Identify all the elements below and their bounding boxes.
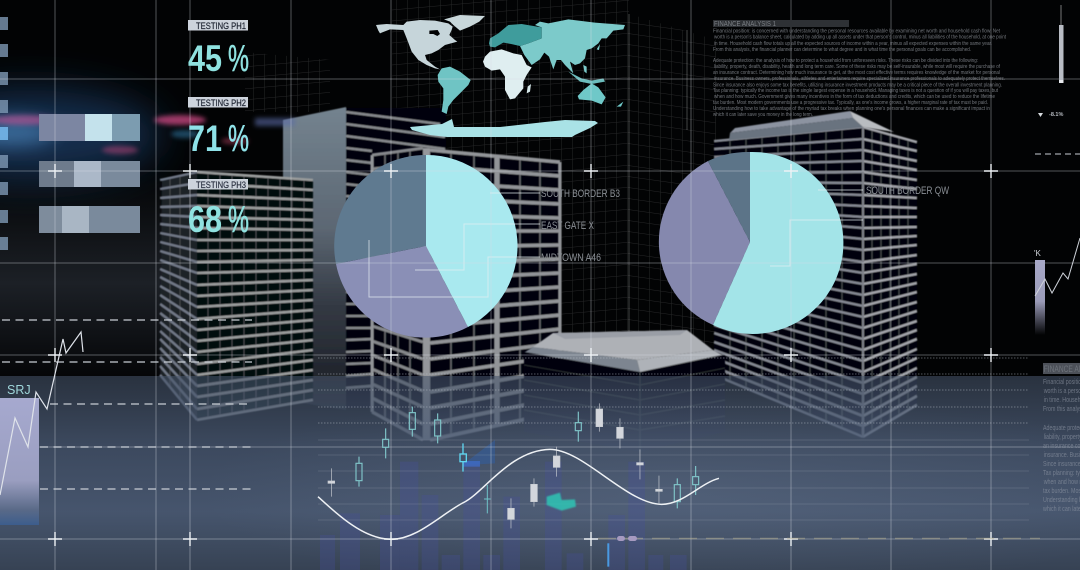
finance analysis text block: insurance. Business owners, professionals, athletes and entertainers require specialized insurance professionals to adequately protect themselves. — [714, 76, 1005, 82]
floor — [0, 376, 1080, 570]
building: left tower — [160, 172, 313, 420]
finance analysis text block, lower copy — [1042, 363, 1080, 513]
finance analysis text block: Since insurance also enjoys some tax benefits, utilizing insurance investment products may be a critical piece of the overall investment planning. — [713, 82, 1002, 88]
new zealand — [617, 102, 623, 107]
slice: cyan — [713, 152, 843, 334]
australia — [578, 83, 606, 104]
pie chart 1 — [334, 155, 518, 338]
segmented bars — [39, 114, 140, 233]
south america — [438, 67, 471, 114]
finance analysis text block — [713, 20, 1007, 118]
lens flare — [0, 90, 295, 180]
pie labels: SOUTH BORDER B3 — [541, 188, 620, 200]
old world — [483, 19, 625, 107]
japan — [597, 44, 600, 50]
delta readout: -8.1% — [1049, 112, 1063, 118]
finance analysis text block: an insurance contract. Determining how much insurance to get, at the most cost effective terms requires knowledge of the market for personal — [713, 70, 1000, 76]
candlesticks — [328, 403, 699, 528]
finance analysis text block: which it can later save you money in the long term. — [713, 112, 813, 118]
pie labels: SOUTH BORDER QW — [866, 185, 949, 197]
finance analysis text block: Understanding how to take advantage of the myriad tax breaks when planning one's personal finances can make a significant impact in — [713, 106, 990, 112]
bright candle — [460, 443, 466, 472]
world map — [376, 15, 625, 137]
right line chart — [1034, 238, 1080, 335]
finance analysis text block: in time. Household cash flow totals up all the expected sources of income within a year, minus all expected expenses within the same year. — [714, 41, 992, 47]
finance analysis text block: From this analysis, the financial planner can determine to what degree and in what time the personal goals can be accomplished. — [713, 47, 971, 53]
bar — [1035, 260, 1045, 335]
madagascar — [527, 84, 531, 93]
testing stat: phase 2: TESTING PH2 — [196, 98, 246, 109]
label: SRJ — [7, 383, 31, 397]
building: right tower roof — [729, 111, 894, 140]
building: low podium — [524, 330, 725, 452]
filled candles — [328, 403, 662, 528]
pie labels: MIDTOWN A46 — [541, 252, 601, 264]
left edge squares — [0, 17, 8, 250]
antarctica — [410, 119, 598, 137]
africa — [483, 49, 532, 99]
teal glitch mark — [547, 493, 576, 511]
slice: blue grey — [708, 152, 750, 242]
floor glow — [200, 376, 1080, 570]
delta readout — [1038, 112, 1063, 118]
pie labels — [541, 185, 949, 264]
pie callout lines — [369, 190, 863, 297]
finance analysis text block: when and how much. Government gives many incentives in the form of tax deductions and credits, which can be used to reduce the lifetime — [714, 94, 995, 100]
testing stat: phase 3: % — [228, 199, 249, 240]
finance analysis text block: tax burden. Most modern governments use a progressive tax. Typically, as one's income grows, a higher marginal rate of tax must be paid. — [713, 100, 988, 106]
slice: cyan — [426, 155, 518, 327]
bar 3 — [39, 206, 140, 233]
pie labels: EAST GATE X — [541, 220, 594, 232]
wave curve — [318, 449, 719, 539]
slice: blue grey — [334, 155, 426, 264]
south east asia islands — [568, 72, 605, 84]
testing stat: phase 3: 68 — [188, 199, 222, 240]
finance analysis text block: Financial position: is concerned with understanding the personal resources available by examining net worth and household cash flow. Net — [713, 28, 1001, 34]
philippines — [583, 65, 587, 73]
building: centre tower — [372, 148, 560, 440]
testing stat: phase 1: 45 — [188, 38, 222, 79]
finance analysis text block: worth is a person's balance sheet, calculated by adding up all assets under that person's control, minus all liabilities of the household, at one point — [714, 34, 1007, 40]
testing stat: phase 2 — [188, 97, 249, 159]
testing stat: phase 1 — [188, 20, 249, 79]
dashed guide lines left — [2, 320, 252, 489]
top right gauge — [1059, 5, 1064, 83]
wireframe buildings — [245, 0, 716, 360]
slice: lavender — [659, 161, 750, 325]
bar 1 — [39, 114, 140, 141]
left line chart — [0, 332, 83, 525]
testing stat: phase 2: 71 — [188, 118, 222, 159]
left haze — [0, 170, 340, 376]
americas — [376, 15, 485, 114]
asia — [520, 19, 625, 73]
testing stat: phase 1: TESTING PH1 — [196, 21, 246, 32]
building: right tower — [714, 127, 917, 437]
legend pills — [598, 536, 1040, 541]
testing stat: phase 3 — [188, 179, 249, 240]
bar — [0, 398, 39, 525]
building: back tower — [283, 107, 446, 410]
label: 'K — [1034, 249, 1042, 258]
finance analysis text block: FINANCE ANALYSIS 1 — [714, 21, 776, 28]
finance analysis text block: Tax planning: typically the income tax is the single largest expense in a household. Managing taxes is not a question of if you will pay taxes, but — [713, 88, 999, 94]
dotted guide lines centre — [318, 358, 1029, 520]
europe and russia — [489, 24, 542, 47]
hollow candles — [356, 407, 699, 508]
line — [0, 332, 83, 495]
greenland — [444, 15, 485, 31]
line — [1035, 238, 1080, 296]
testing stat: phase 3: TESTING PH3 — [196, 180, 246, 191]
testing stat: phase 1: % — [228, 38, 249, 79]
testing stat: phase 2: % — [228, 118, 249, 159]
finance analysis text block: liability, property, death, disability, health and long term care. Some of these risks may be self-insurable, while most will require the purchase of — [714, 64, 1001, 70]
pie chart 2 — [659, 152, 843, 334]
north america — [376, 20, 457, 69]
blue histogram bars — [320, 440, 687, 570]
finance analysis text block: Adequate protection: the analysis of how to protect a household from unforeseen risks. These risks can be divided into the following: — [713, 58, 978, 64]
bar 2 — [39, 161, 140, 187]
grid crosses — [48, 164, 998, 546]
dashed line top right — [1035, 153, 1080, 155]
slice: lavender — [336, 246, 468, 338]
